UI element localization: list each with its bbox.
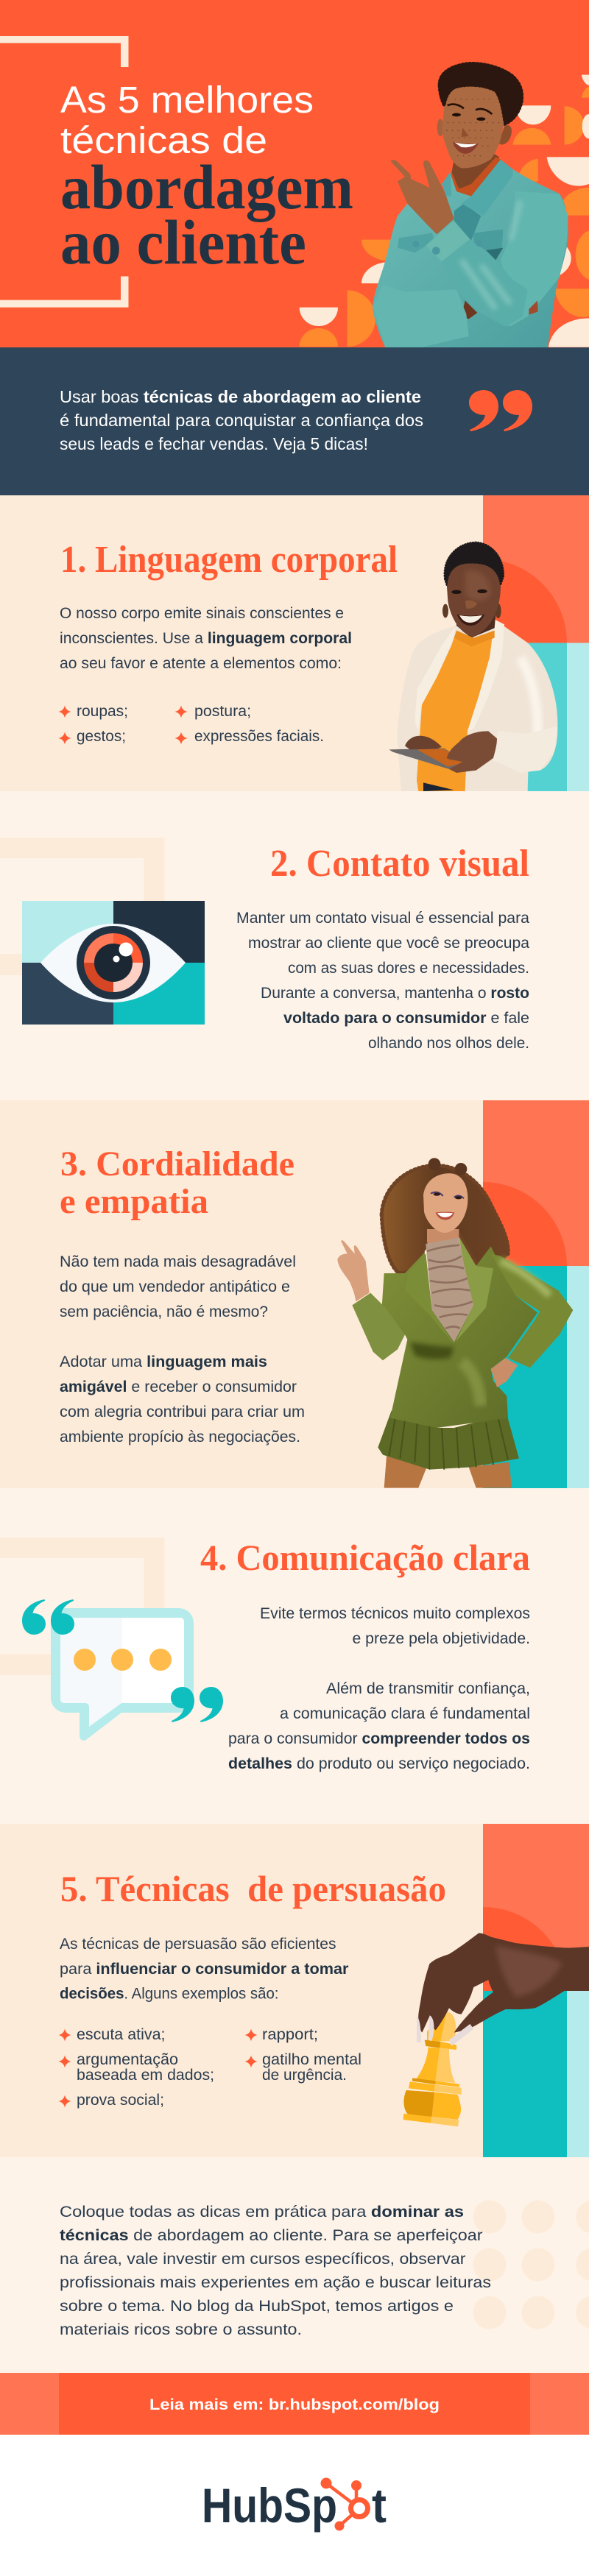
- paragraph: Durante a conversa, mantenha o rosto: [261, 985, 529, 1002]
- heading: 2. Contato visual: [270, 843, 529, 885]
- icon: sprocket: [321, 2477, 368, 2530]
- logo: HubSpot: t: [372, 2478, 387, 2533]
- panel: 3 cordialidade e empatia: [0, 1100, 589, 1488]
- paragraph: ambiente propício às negociações.: [60, 1429, 300, 1446]
- paragraph: [60, 605, 352, 672]
- panel: conclusion: [0, 2157, 589, 2373]
- panel: call to action: [0, 2373, 589, 2435]
- logo: HubSpot: HubSp: [202, 2478, 337, 2533]
- decorative bracket: [0, 838, 165, 975]
- intro text: seus leads e fechar vendas. Veja 5 dicas!: [60, 434, 368, 453]
- paragraph: na área, vale investir em cursos específicos, observar: [60, 2251, 466, 2268]
- icon: chess pawn: [403, 2011, 462, 2126]
- intro text: [60, 387, 423, 453]
- paragraph: [228, 1605, 530, 1772]
- photo: man in teal jacket: [373, 63, 568, 348]
- paragraph: voltado para o consumidor e fale: [283, 1010, 529, 1027]
- geometric pattern: [300, 75, 589, 347]
- list: [59, 703, 324, 745]
- link text: Leia mais em: br.hubspot.com/blog: [149, 2396, 440, 2413]
- paragraph: [60, 1936, 349, 2002]
- paragraph: O nosso corpo emite sinais conscientes e: [60, 605, 344, 622]
- paragraph: Coloque todas as dicas em prática para dominar as: [60, 2204, 464, 2221]
- section background: [0, 1488, 589, 1824]
- list: argumentação: [77, 2051, 178, 2068]
- intro text: Usar boas técnicas de abordagem ao cliente: [60, 387, 421, 406]
- heading: e empatia: [60, 1182, 208, 1221]
- section background: [0, 495, 589, 791]
- decorative blocks: [483, 495, 589, 791]
- paragraph: detalhes do produto ou serviço negociado.: [228, 1755, 530, 1772]
- icon: eye: [22, 901, 205, 1025]
- panel: hero: [0, 0, 589, 348]
- list: rapport;: [262, 2026, 318, 2043]
- list: baseada em dados;: [77, 2067, 214, 2084]
- paragraph: para influenciar o consumidor a tomar: [60, 1961, 349, 1978]
- heading: 1. Linguagem corporal: [60, 539, 398, 581]
- icon: closing quotes: [171, 1687, 223, 1722]
- section background: [0, 2157, 589, 2373]
- paragraph: sobre o tema. No blog da HubSpot, temos artigos e: [60, 2298, 454, 2315]
- paragraph: [60, 1253, 305, 1446]
- list: escuta ativa;: [77, 2026, 165, 2043]
- decorative bracket: [0, 1538, 165, 1675]
- section background: [0, 1824, 589, 2157]
- heading: 4. Comunicação clara: [200, 1537, 530, 1578]
- paragraph: Evite termos técnicos muito complexos: [260, 1605, 530, 1622]
- photo: hand holding pawn: [403, 1933, 589, 2126]
- panel: 5 técnicas de persuasão: [0, 1824, 589, 2157]
- logo: HubSpot: [0, 2435, 589, 2576]
- icon: closing quote: [469, 390, 532, 431]
- paragraph: com as suas dores e necessidades.: [288, 960, 529, 977]
- paragraph: inconscientes. Use a linguagem corporal: [60, 630, 352, 647]
- icon: opening quotes: [22, 1599, 74, 1635]
- hero background: [0, 0, 589, 347]
- title: técnicas de: [60, 119, 267, 161]
- paragraph: ao seu favor e atente a elementos como:: [60, 655, 342, 672]
- paragraph: Não tem nada mais desagradável: [60, 1253, 296, 1270]
- paragraph: decisões. Alguns exemplos são:: [60, 1986, 278, 2002]
- decorative blocks: [483, 1100, 589, 1488]
- paragraph: Manter um contato visual é essencial para: [236, 910, 529, 927]
- paragraph: profissionais mais experientes em ação e buscar leituras: [60, 2274, 491, 2291]
- dot pattern: [473, 2201, 589, 2329]
- paragraph: amigável e receber o consumidor: [60, 1379, 297, 1395]
- panel: 1 linguagem corporal: [0, 495, 589, 791]
- list: prova social;: [77, 2092, 164, 2109]
- icon: speech bubble: [22, 1599, 223, 1741]
- paragraph: olhando nos olhos dele.: [368, 1035, 529, 1052]
- paragraph: técnicas de abordagem ao cliente. Para se aperfeiçoar: [60, 2227, 483, 2244]
- intro text: é fundamental para conquistar a confiança dos: [60, 411, 423, 430]
- paragraph: com alegria contribui para criar um: [60, 1404, 305, 1420]
- paragraph: [60, 2204, 491, 2338]
- paragraph: Adotar uma linguagem mais: [60, 1354, 267, 1370]
- paragraph: e preze pela objetividade.: [352, 1630, 530, 1647]
- paragraph: As técnicas de persuasão são eficientes: [60, 1936, 336, 1953]
- list: expressões faciais.: [194, 728, 324, 745]
- list: postura;: [194, 703, 251, 720]
- paragraph: Além de transmitir confiança,: [326, 1680, 530, 1697]
- section background: [0, 1100, 589, 1488]
- heading: [60, 1144, 294, 1221]
- title: abordagem: [60, 152, 353, 222]
- list: gestos;: [77, 728, 126, 745]
- list: de urgência.: [262, 2067, 347, 2084]
- list: roupas;: [77, 703, 128, 720]
- paragraph: sem paciência, não é mesmo?: [60, 1303, 268, 1320]
- panel: intro: [0, 347, 589, 495]
- paragraph: do que um vendedor antipático e: [60, 1278, 290, 1295]
- banner background: [0, 2373, 589, 2435]
- photo: woman with tablet: [389, 542, 557, 791]
- photo: woman in green blazer: [337, 1158, 573, 1488]
- paragraph: [236, 910, 529, 1052]
- frame bracket top: [0, 36, 128, 67]
- title: [60, 79, 353, 277]
- title: As 5 melhores: [60, 79, 314, 121]
- title: ao cliente: [60, 207, 306, 277]
- paragraph: mostrar ao cliente que você se preocupa: [248, 935, 529, 952]
- list: [59, 2026, 361, 2109]
- paragraph: materiais ricos sobre o assunto.: [60, 2321, 302, 2338]
- intro background: [0, 347, 589, 495]
- heading: 5. Técnicas de persuasão: [60, 1868, 446, 1909]
- paragraph: para o consumidor compreender todos os: [228, 1730, 530, 1747]
- list: gatilho mental: [262, 2051, 361, 2068]
- paragraph: a comunicação clara é fundamental: [280, 1705, 530, 1722]
- decorative blocks: [483, 1824, 589, 2157]
- panel: 2 contato visual: [0, 791, 589, 1100]
- panel: 4 comunicação clara: [0, 1488, 589, 1824]
- frame bracket bottom: [0, 277, 128, 308]
- heading: 3. Cordialidade: [60, 1144, 294, 1183]
- section background: [0, 791, 589, 1100]
